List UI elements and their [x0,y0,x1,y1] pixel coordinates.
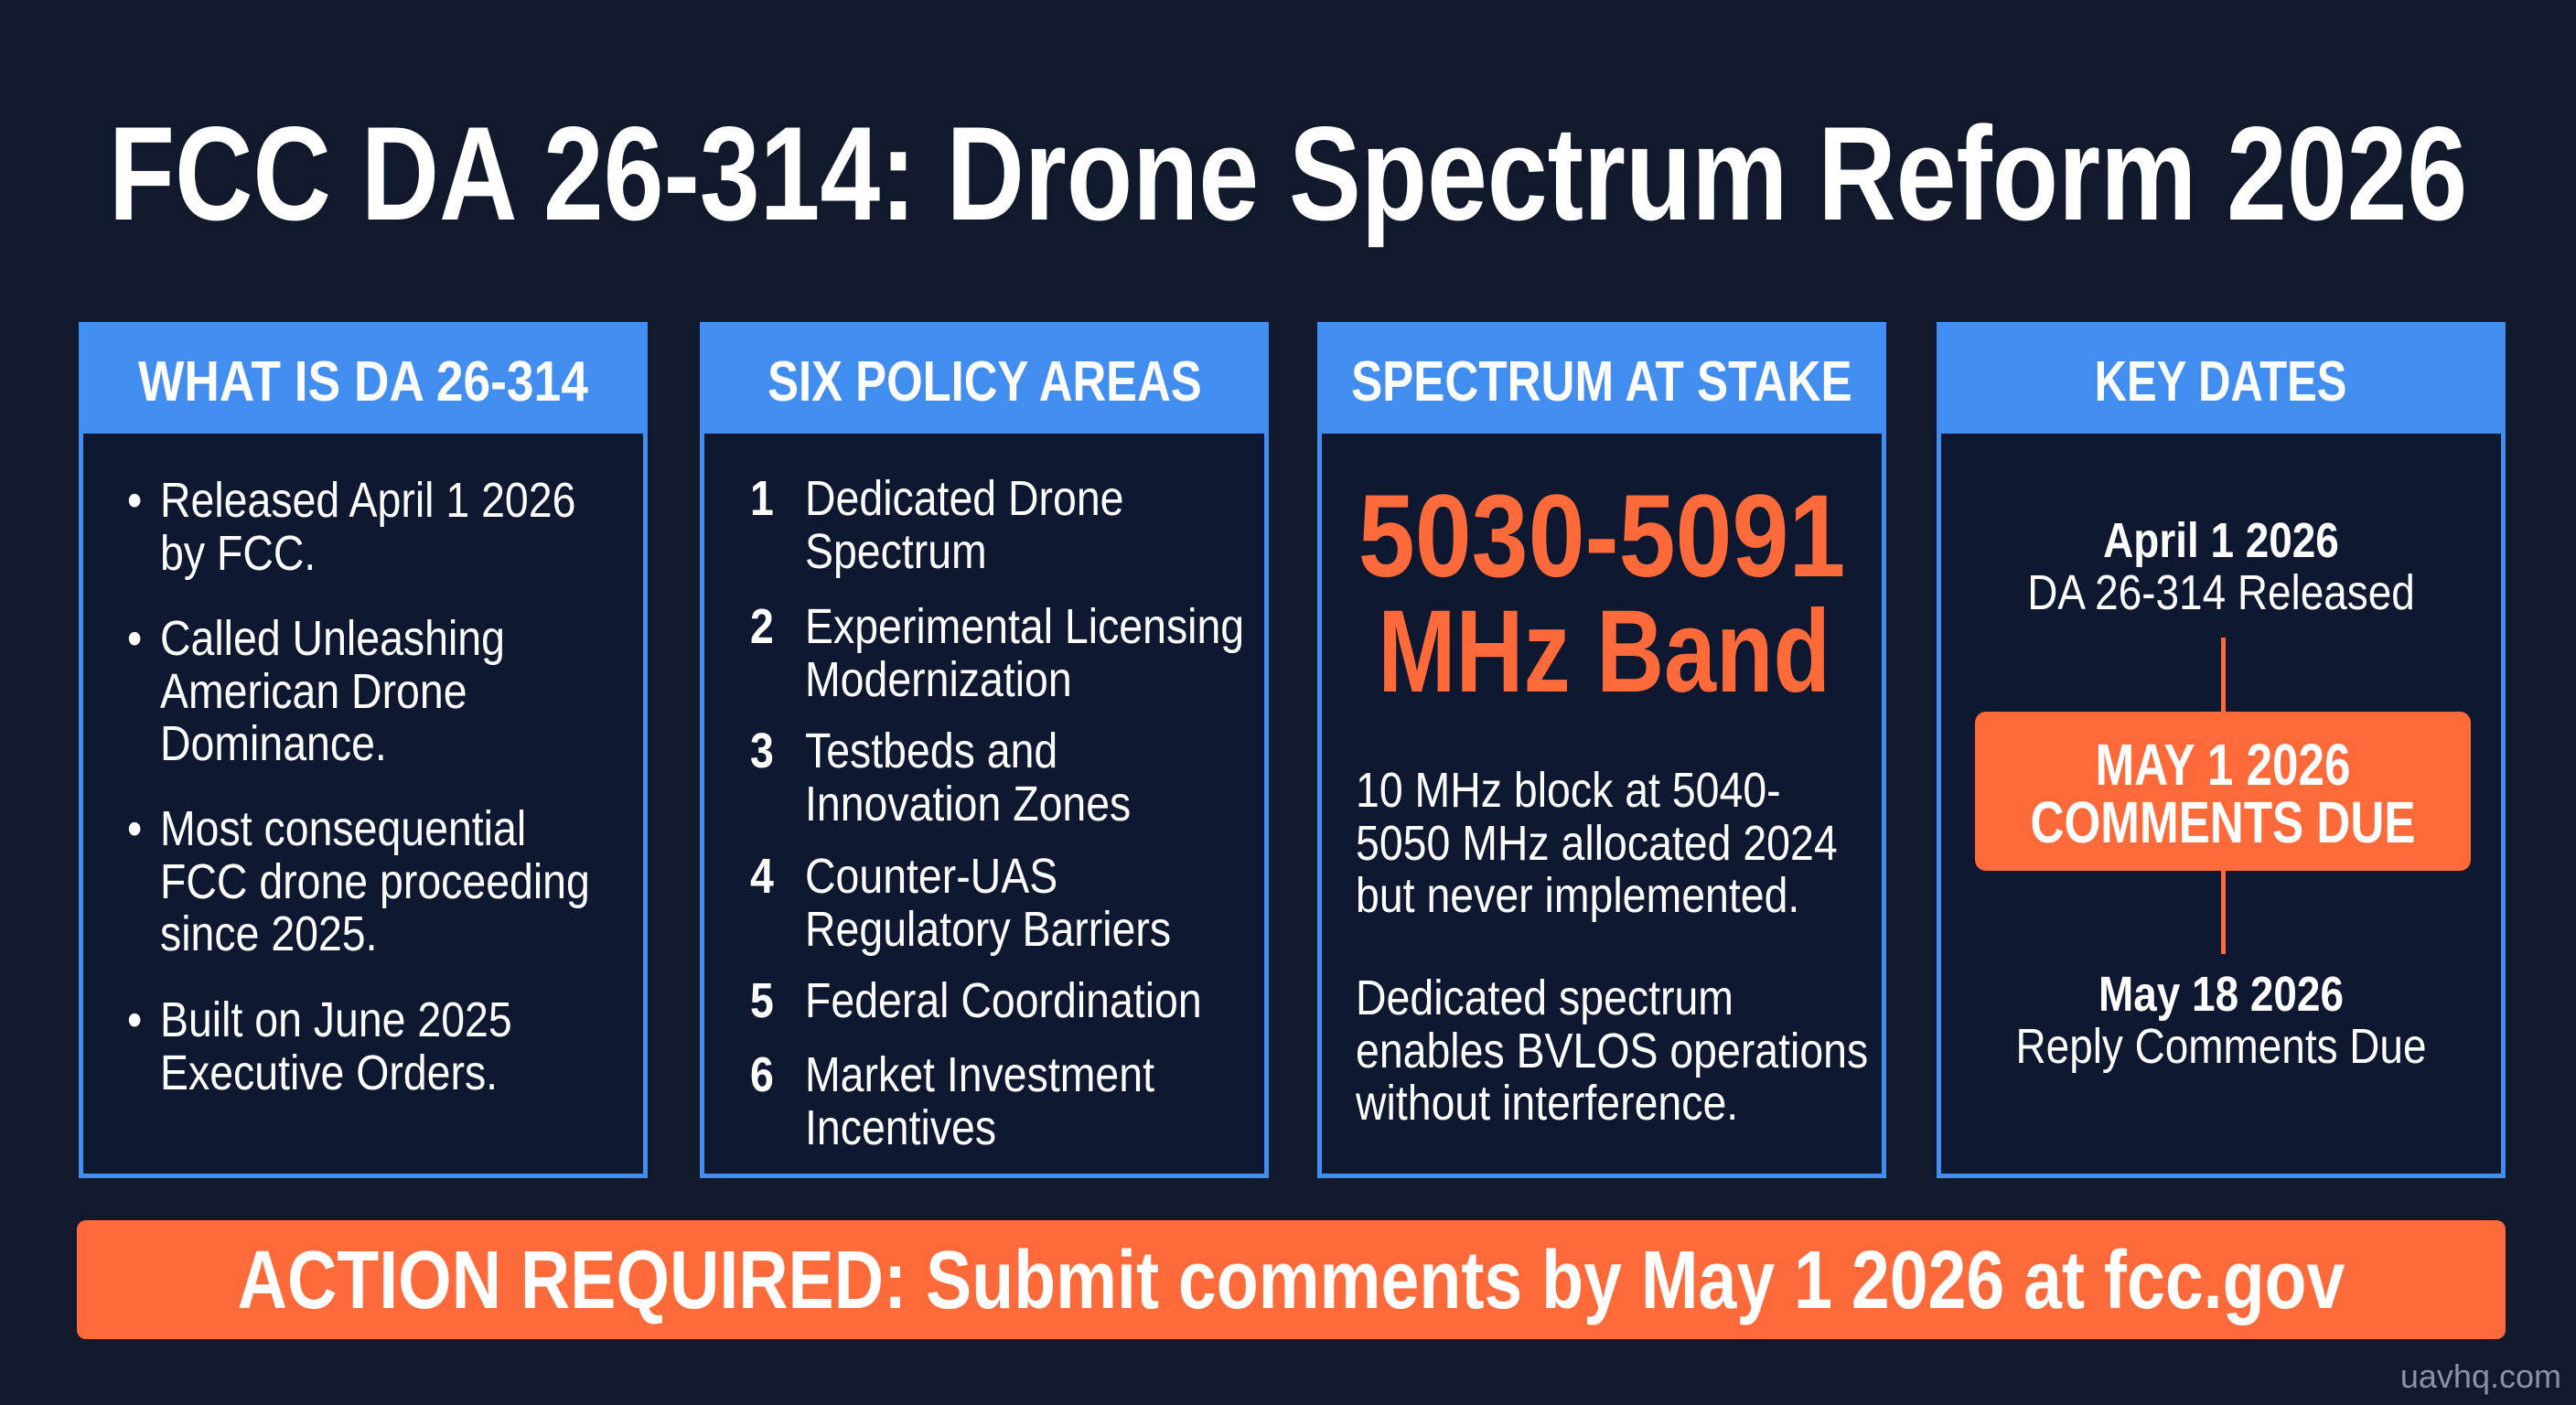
bullet list: since 2025. [160,906,378,961]
numbered list: Market Investment [805,1047,1154,1102]
heading: key dates: KEY DATES [2095,350,2347,413]
bullet list: • [127,801,142,856]
numbered list: 2 [750,599,774,654]
numbered list: Regulatory Barriers [805,902,1171,957]
heading: six policy areas: SIX POLICY AREAS [767,350,1201,413]
bullet list: Dominance. [160,716,387,771]
bullet list: by FCC. [160,525,316,580]
big band number: MHz Band [1378,586,1830,717]
spectrum description: 10 MHz block at 5040- [1356,763,1781,818]
date: april 1 [2027,513,2415,620]
numbered list: Dedicated Drone [805,471,1124,526]
highlight box: comments due [1975,712,2471,871]
panel: key dates [1937,322,2506,1178]
timeline connector [2221,638,2226,954]
big band number: 5030-5091 [1358,471,1845,602]
numbered list: Spectrum [805,523,987,578]
numbered list: Testbeds and [805,724,1057,778]
bullet list: • [127,992,142,1047]
date: may 18 [2016,967,2426,1074]
panel: six policy areas [700,322,1269,1178]
heading: spectrum: SPECTRUM AT STAKE [1351,350,1852,413]
heading: what is: WHAT IS DA 26-314 [138,350,588,413]
action bar [77,1220,2506,1339]
big band number [1358,471,1845,717]
bullet list: Built on June 2025 [160,992,512,1047]
spectrum description [1356,763,1838,923]
numbered list: 3 [750,724,774,778]
BVLOS note: Dedicated spectrum [1356,971,1733,1025]
spectrum description: but never implemented. [1356,868,1799,923]
bullet list: • [127,611,142,666]
BVLOS note: enables BVLOS operations [1356,1023,1868,1078]
heading: spectrum [1322,327,1882,434]
BVLOS note [1356,971,1868,1131]
heading: six policy areas [704,327,1264,434]
date: may 18: Reply Comments Due [2016,1019,2426,1074]
action bar: ACTION REQUIRED: Submit comments by May 1 2026 at fcc.gov [238,1235,2345,1326]
bullet list: • [127,473,142,528]
spectrum description: 5050 MHz allocated 2024 [1356,816,1838,871]
bullet list: Most consequential [160,801,526,856]
numbered list: Innovation Zones [805,776,1131,831]
heading: key dates [1941,327,2501,434]
bullet list: FCC drone proceeding [160,854,590,909]
numbered list: 4 [750,849,774,904]
numbered list: Modernization [805,651,1072,706]
highlight box: comments due: MAY 1 2026 [2096,732,2350,798]
panel: what is DA 26-314 [79,322,648,1178]
numbered list: 5 [750,973,774,1028]
date: april 1: April 1 2026 [2103,513,2339,568]
highlight box: comments due: COMMENTS DUE [2031,789,2415,855]
bullet list: Called Unleashing [160,611,505,666]
bullet list: American Drone [160,664,467,719]
numbered list: Counter-UAS [805,849,1057,904]
panel: spectrum at stake [1317,322,1886,1178]
BVLOS note: without interference. [1356,1076,1738,1131]
bullet list: Released April 1 2026 [160,473,575,528]
numbered list: Federal Coordination [805,973,1202,1028]
bullet list [127,473,590,1099]
numbered list: Experimental Licensing [805,599,1244,654]
heading: what is [83,327,643,434]
numbered list: 6 [750,1047,774,1102]
date: april 1: DA 26-314 Released [2027,565,2415,620]
date: may 18: May 18 2026 [2098,967,2344,1022]
numbered list [750,471,1244,1154]
numbered list: 1 [750,471,774,526]
title: FCC DA 26-314: Drone Spectrum Reform 2026 [109,99,2467,248]
bullet list: Executive Orders. [160,1045,498,1099]
numbered list: Incentives [805,1099,996,1154]
watermark: uavhq.com [2400,1357,2561,1395]
